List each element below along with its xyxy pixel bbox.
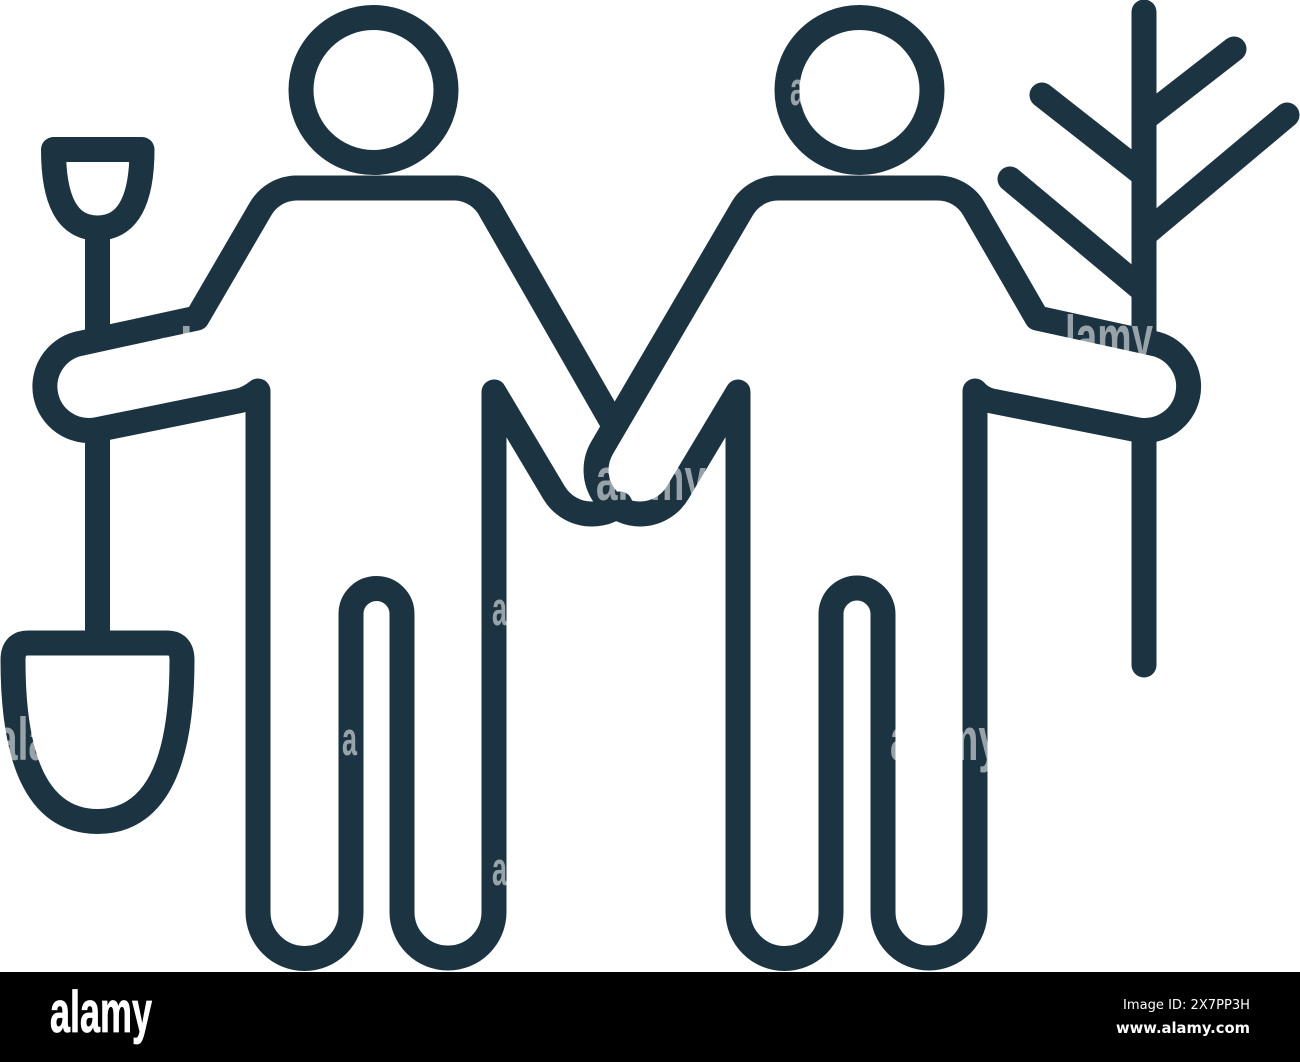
watermark overlay: alamy xyxy=(0,706,106,773)
right person xyxy=(596,18,1189,958)
watermark overlay: alamy xyxy=(596,446,706,513)
watermark overlay: a xyxy=(342,712,357,765)
watermark overlay: a xyxy=(492,582,507,635)
footer image id: Image ID: 2X7PP3H xyxy=(1123,997,1250,1013)
watermark overlay: a xyxy=(492,842,507,895)
left person xyxy=(45,18,620,958)
watermark overlay: a xyxy=(790,62,805,115)
footer bar xyxy=(0,972,1300,1062)
left person body xyxy=(45,188,620,958)
watermark overlay xyxy=(0,62,1153,895)
footer logo: alamy: alamy xyxy=(50,980,152,1045)
left person head xyxy=(301,18,446,162)
icon: sapling xyxy=(1010,12,1287,665)
right person body xyxy=(596,188,1189,958)
watermark overlay: al xyxy=(153,316,193,383)
watermark overlay: alamy xyxy=(890,706,1000,773)
right person head xyxy=(787,18,932,162)
icon: shovel xyxy=(13,150,182,822)
watermark overlay: lamy xyxy=(1065,304,1153,371)
footer url: www.alamy.com xyxy=(1116,1019,1250,1037)
